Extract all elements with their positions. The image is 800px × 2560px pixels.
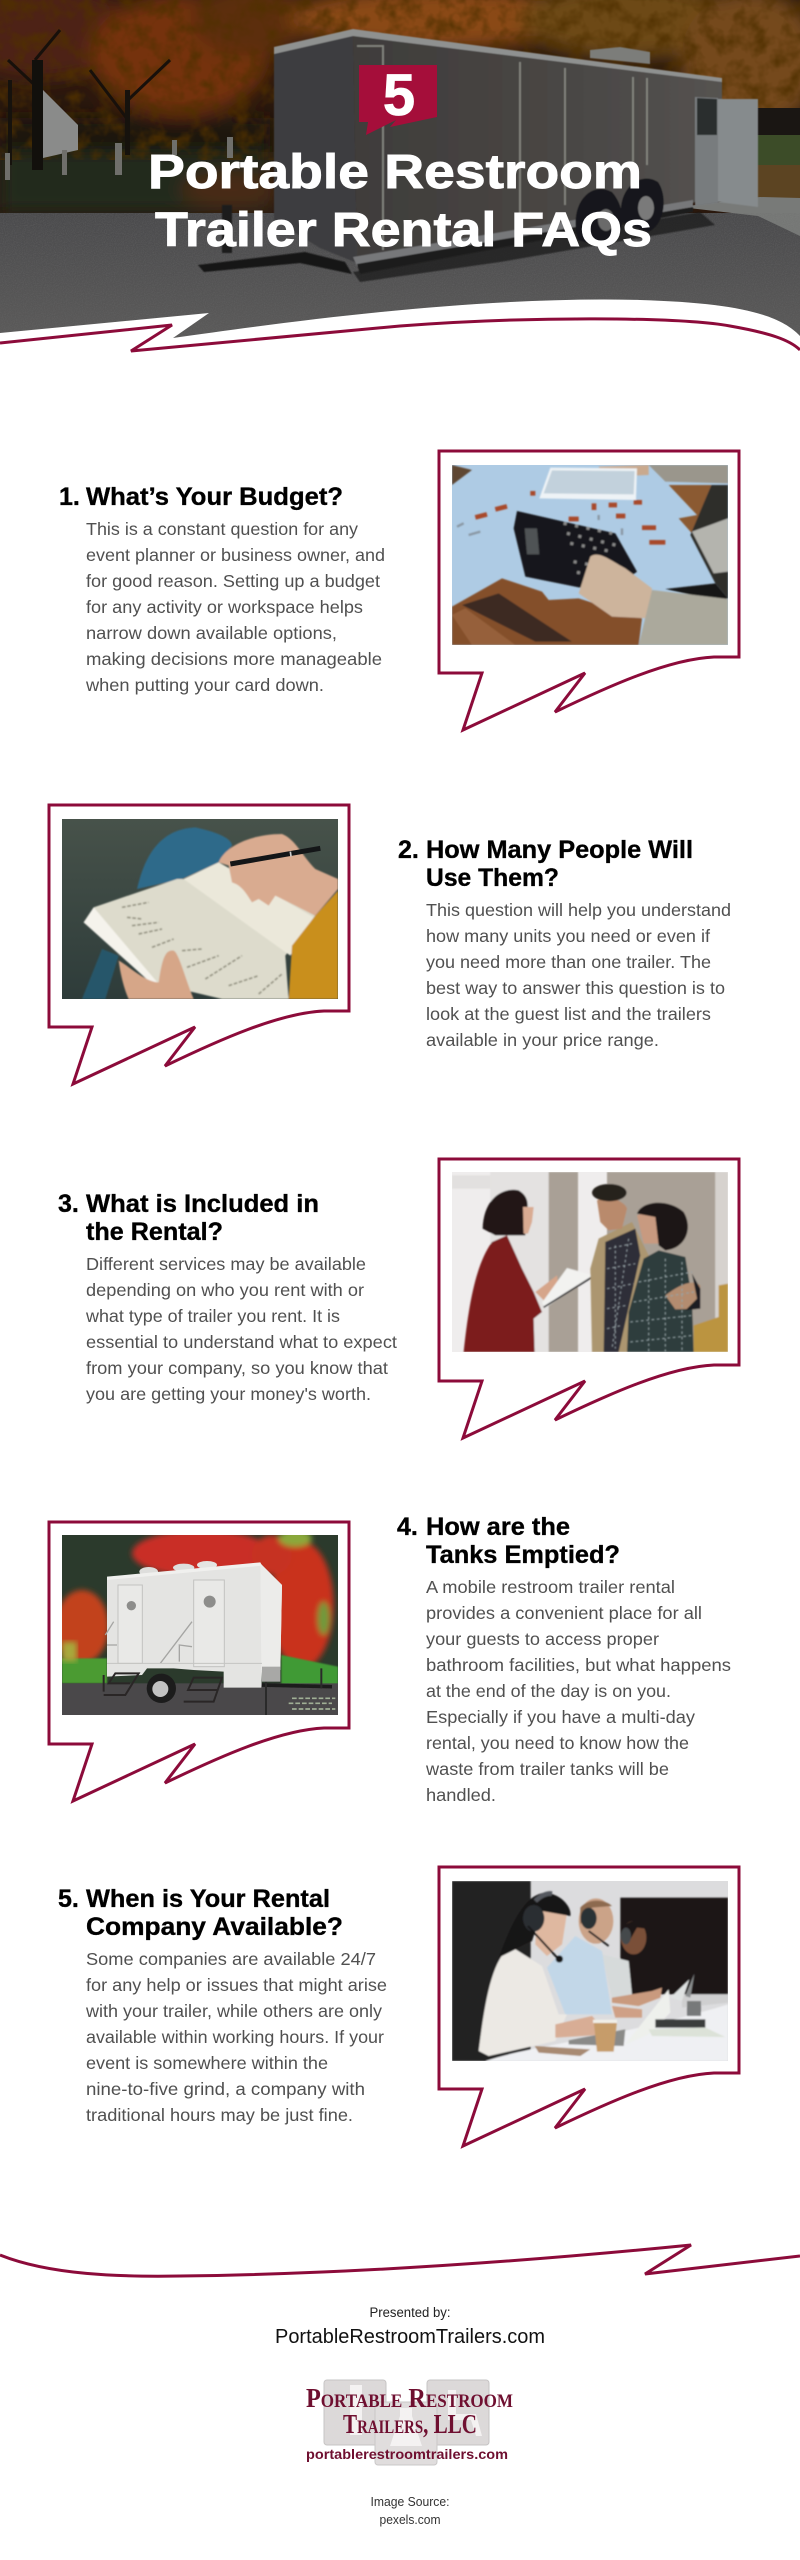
heading 3: the Rental?: [86, 1218, 223, 1246]
body text 1: This is a constant question for any: [86, 519, 358, 539]
body text 1: event planner or business owner, and: [86, 545, 385, 565]
body text 4: A mobile restroom trailer rental: [426, 1577, 675, 1597]
body text 2: how many units you need or even if: [426, 926, 710, 946]
heading 4: 4.: [397, 1513, 418, 1541]
body text 5: traditional hours may be just fine.: [86, 2105, 353, 2125]
hero photo: trailer in autumn park: [0, 0, 800, 360]
speech bubble frame 5: [439, 1867, 739, 2146]
body text 5: for any help or issues that might arise: [86, 1975, 387, 1995]
body text 3: Different services may be available: [86, 1254, 366, 1274]
title: [148, 146, 652, 257]
body text 3: essential to understand what to expect: [86, 1332, 397, 1352]
body text 4: provides a convenient place for all: [426, 1603, 702, 1623]
body text 4: rental, you need to know how the: [426, 1733, 689, 1753]
panel: FAQ 4 tanks: [49, 1513, 731, 1805]
image source: pexels.com: [380, 2512, 440, 2527]
heading 4: How are the: [426, 1513, 570, 1541]
footer divider wave: [0, 2245, 800, 2276]
body text 3: [85, 1254, 397, 1404]
heading 2: 2.: [398, 836, 419, 864]
body text 4: handled.: [426, 1785, 496, 1805]
heading 5: 5.: [58, 1885, 79, 1913]
heading 4: Tanks Emptied?: [426, 1541, 620, 1569]
body text 5: [85, 1949, 387, 2125]
body text 4: your guests to access proper: [426, 1629, 659, 1649]
body text 4: at the end of the day is on you.: [426, 1681, 671, 1701]
speech bubble frame 4: [49, 1522, 349, 1801]
company logo: Portable Restroom: [306, 2383, 513, 2413]
heading 4: [397, 1513, 620, 1569]
body text 4: [425, 1577, 731, 1805]
white wave: [0, 300, 800, 360]
trailer body: [198, 29, 758, 282]
body text 3: depending on who you rent with or: [86, 1280, 364, 1300]
body text 5: nine-to-five grind, a company with: [86, 2079, 365, 2099]
company logo: Trailers, LLC: [343, 2409, 477, 2439]
photo: calculator on papers: [452, 465, 728, 645]
badge with number 5: [359, 63, 437, 135]
body text 1: for good reason. Setting up a budget: [86, 571, 380, 591]
presented by: Presented by:: [370, 2305, 450, 2320]
body text 4: Especially if you have a multi-day: [426, 1707, 695, 1727]
heading 3: [58, 1190, 319, 1246]
body text 4: bathroom facilities, but what happens: [426, 1655, 731, 1675]
body text 2: [426, 900, 731, 1050]
image source: [370, 2494, 450, 2527]
photo: call center staff: [452, 1881, 728, 2061]
body text 2: This question will help you understand: [426, 900, 731, 920]
panel: FAQ 5 availability: [58, 1867, 739, 2146]
image source: Image Source:: [370, 2494, 450, 2509]
title: Trailer Rental FAQs: [155, 204, 652, 257]
body text 5: with your trailer, while others are only: [85, 2001, 382, 2021]
heading 2: How Many People Will: [426, 836, 693, 864]
title: Portable Restroom: [148, 146, 642, 199]
heading 2: [398, 836, 693, 892]
speech bubble frame 2: [49, 805, 349, 1084]
heading 2: Use Them?: [426, 864, 559, 892]
speech bubble frame 3: [439, 1159, 739, 1438]
maroon wave line: [0, 319, 800, 351]
panel: FAQ 2 people: [49, 805, 731, 1084]
panel: FAQ 1 budget: [59, 451, 739, 730]
heading 5: When is Your Rental: [86, 1885, 330, 1913]
body text 2: best way to answer this question is to: [426, 978, 725, 998]
body text 5: available within working hours. If your: [86, 2027, 384, 2047]
hero banner: [0, 0, 800, 360]
body text 3: you are getting your money's worth.: [86, 1384, 371, 1404]
body text 1: [85, 519, 385, 695]
heading 1: 1.: [59, 483, 80, 511]
panel: FAQ 3 included: [58, 1159, 739, 1438]
body text 4: waste from trailer tanks will be: [425, 1759, 669, 1779]
body text 1: making decisions more manageable: [86, 649, 382, 669]
heading 3: 3.: [58, 1190, 79, 1218]
photo: white restroom trailer: [62, 1535, 338, 1715]
body text 1: when putting your card down.: [85, 675, 324, 695]
body text 5: event is somewhere within the: [86, 2053, 328, 2073]
body text 1: narrow down available options,: [86, 623, 337, 643]
body text 2: available in your price range.: [426, 1030, 659, 1050]
speech bubble frame 1: [439, 451, 739, 730]
heading 1: What’s Your Budget?: [86, 483, 343, 511]
footer: [275, 2305, 545, 2527]
heading 5: Company Available?: [86, 1913, 343, 1941]
heading 5: [58, 1885, 343, 1941]
body text 5: Some companies are available 24/7: [86, 1949, 376, 1969]
company logo: portablerestroomtrailers.com: [306, 2446, 508, 2462]
website: PortableRestroomTrailers.com: [275, 2326, 545, 2348]
company logo: [306, 2380, 513, 2465]
body text 1: for any activity or workspace helps: [86, 597, 363, 617]
body text 3: what type of trailer you rent. It is: [85, 1306, 340, 1326]
body text 2: look at the guest list and the trailers: [426, 1004, 711, 1024]
heading 3: What is Included in: [86, 1190, 319, 1218]
badge with number 5: 5: [383, 63, 415, 128]
photo: writing in notebook: [62, 819, 338, 999]
body text 3: from your company, so you know that: [86, 1358, 388, 1378]
body text 2: you need more than one trailer. The: [426, 952, 711, 972]
photo: agent with couple: [452, 1172, 728, 1352]
